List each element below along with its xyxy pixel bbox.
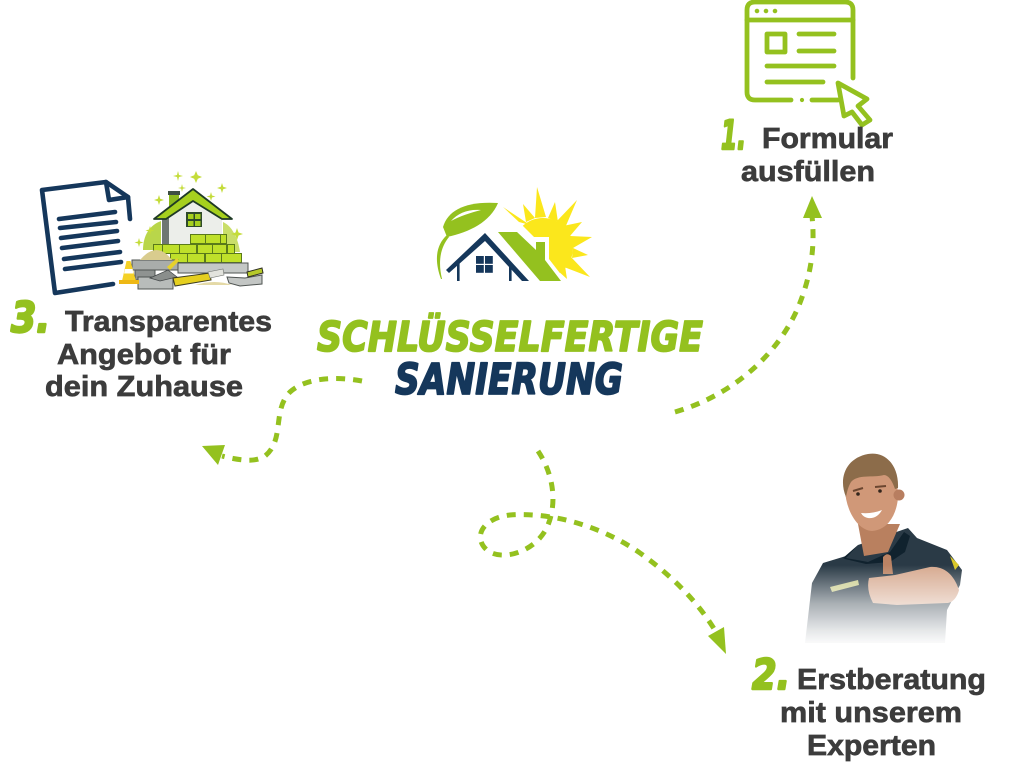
icon: document: [42, 182, 130, 293]
arrow: logo to step 3: [202, 379, 362, 465]
logo: leaf, house and sun: [437, 187, 592, 285]
step 3 label: Angebot für: [57, 339, 231, 371]
icon: browser form with cursor: [747, 2, 870, 125]
title: SANIERUNG: [395, 355, 623, 405]
title: [317, 313, 703, 405]
step 3 label: 3.: [11, 293, 50, 342]
step 2 label: [752, 650, 986, 762]
step 1 label: Formular: [762, 123, 893, 155]
arrow: logo to step 1: [675, 196, 822, 412]
photo: advisor giving thumbs up: [800, 454, 965, 645]
step 2 label: mit unserem: [780, 697, 962, 729]
step 3 label: Transparentes: [65, 306, 272, 338]
step 3 label: dein Zuhause: [45, 371, 243, 403]
step 1 label: 1.: [721, 113, 746, 159]
illustration: house with bricks: [119, 171, 263, 289]
step 1 label: ausfüllen: [741, 156, 875, 188]
title: SCHLÜSSELFERTIGE: [317, 313, 703, 361]
step 2 label: 2.: [752, 650, 790, 699]
arrow: logo to step 2: [480, 451, 726, 654]
step 2 label: Erstberatung: [797, 664, 986, 696]
step 1 label: [721, 113, 893, 188]
step 3 label: [11, 293, 272, 403]
step 2 label: Experten: [807, 730, 936, 762]
